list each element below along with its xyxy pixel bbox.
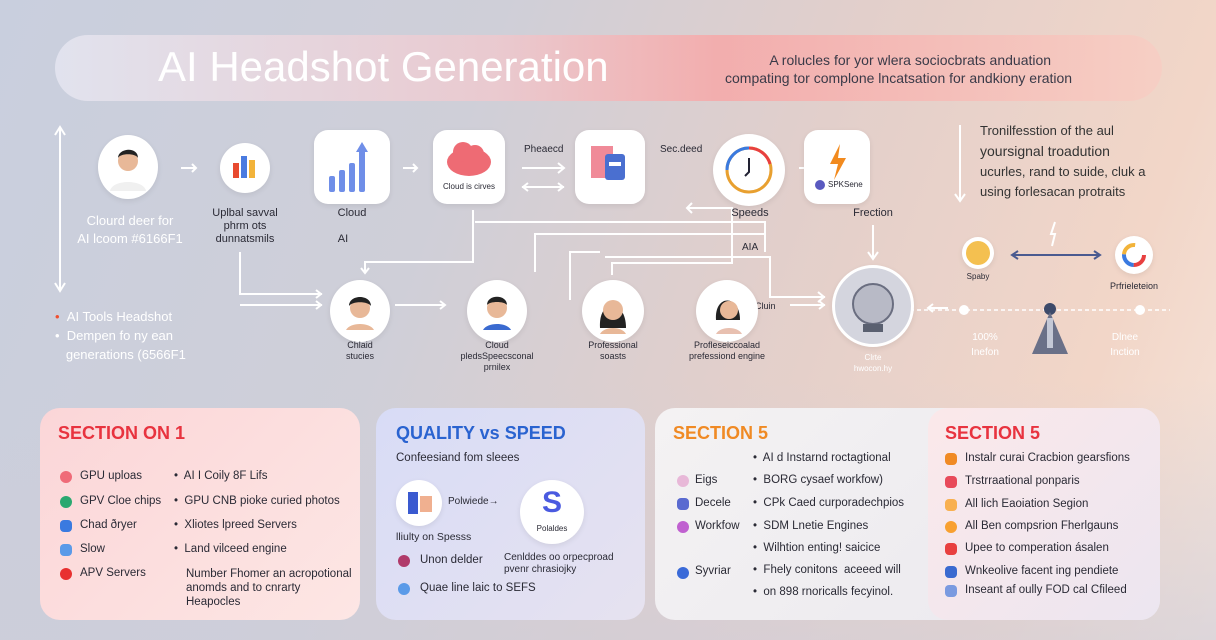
bottom fade: [0, 380, 1216, 640]
panel: quality vs speed: Polaldes: [537, 524, 567, 533]
panel: section 5 orange: • on 898 rnoricalls fecyinol.: [753, 586, 893, 598]
panel: section 5 red: [928, 408, 1160, 620]
node: growth chart box: [314, 130, 390, 204]
text: AI: [338, 233, 348, 245]
panel: quality vs speed: pvenr chrasiojky: [504, 564, 576, 575]
label: sec deed: Sec.deed: [660, 144, 702, 155]
text: Spaby: [967, 272, 989, 281]
label: upload: phrm ots: [224, 220, 266, 232]
label: person 1: Clourd deer for: [87, 213, 173, 228]
text: Inefon: [971, 347, 999, 358]
label: upload: [212, 207, 278, 245]
panel: section 5 orange: Decele: [695, 497, 731, 509]
text block: right description: using forlesacan protraits: [980, 184, 1125, 199]
panel: section 1: Heapocles: [186, 596, 240, 608]
node: cloud box: [433, 130, 505, 204]
left bullet text: • Dempen fo ny ean: [55, 328, 173, 343]
text: prnilex: [484, 362, 510, 372]
panel: section 5 red: Instalr curai Cracbion gearsfions: [965, 452, 1130, 464]
text block: right description: [980, 123, 1146, 199]
panel: section 1: GPV Cloe chips: [80, 495, 161, 507]
panel: quality vs speed: Quae line laic to SEFS: [420, 582, 536, 594]
panel: section 1: Chad ðryer: [80, 519, 137, 531]
panel: section 5 orange: • CPk Caed curporadechpios: [753, 497, 904, 509]
panel: section 5 orange: [655, 408, 1160, 620]
panel: section 5 orange: Syvriar: [695, 565, 731, 577]
text: 100%: [972, 332, 998, 343]
panel: section 5 orange: • Wilhtion enting! saicice: [753, 542, 880, 554]
panel: section 5 red: All Ben compsrion Fherlgauns: [965, 520, 1118, 532]
left bullet text: • AI Tools Headshot: [55, 309, 172, 324]
label: upload: Uplbal savval: [212, 207, 278, 219]
label: phesed: Pheaecd: [524, 144, 563, 155]
panel: section 5 orange: • AI d Instarnd roctagtional: [753, 452, 891, 464]
panel: quality vs speed: [376, 408, 645, 620]
label: person 1: AI lcoom #6166F1: [77, 231, 183, 246]
text: Dlnee: [1112, 332, 1138, 343]
flow diagram connectors: [54, 125, 1170, 354]
panel: section 5 orange: • Fhely conitons aceeed will: [753, 564, 901, 576]
panel: section 5 red: Wnkeolive facent ing pendiete: [965, 565, 1118, 577]
panel: section 1: APV Servers: [80, 567, 146, 579]
right comparison cluster: [962, 237, 994, 269]
panel: quality vs speed: QUALITY vs SPEED: [396, 423, 566, 443]
panel: section 1: • Xliotes lpreed Servers: [174, 519, 297, 531]
title bar: [55, 35, 1162, 101]
panel: section 1: SECTION ON 1: [58, 423, 185, 443]
text: Chlaid: [347, 340, 373, 350]
node: lightning box: SPKSene: [828, 180, 863, 189]
panel: section 5 red: Inseant af oully FOD cal Cfileed: [965, 584, 1127, 596]
text: Cloud: [485, 340, 509, 350]
text: Professional: [588, 340, 638, 350]
text: AIA: [742, 242, 758, 253]
text: stucies: [346, 351, 374, 361]
panel: section 5 orange: Eigs: [695, 474, 717, 486]
text: Cluin: [755, 301, 776, 311]
text block: right description: yoursignal troadution: [980, 143, 1110, 159]
node: document box: [575, 130, 645, 204]
panel: section 1: • AI I Coily 8F Lifs: [174, 470, 268, 482]
node: AI engine circle: [832, 265, 914, 347]
panel: section 5 orange: SECTION 5: [673, 423, 768, 443]
text: Profleseiccoalad: [694, 340, 760, 350]
panel: quality vs speed: Cenlddes oo orpecproad: [504, 552, 614, 563]
node: bar chart circle: [220, 143, 270, 193]
panel: quality vs speed: Confeesiand fom sleees: [396, 452, 519, 464]
label: engine: hwocon.hy: [854, 364, 892, 373]
label: frection: Frection: [853, 207, 893, 219]
text: Prfrieleteion: [1110, 281, 1158, 291]
subtitle: compating tor complone lncatsation for andkiony eration: [725, 70, 1072, 86]
bottom person nodes: [330, 280, 390, 342]
panel: section 1: • Land vilceed engine: [174, 543, 287, 555]
node: speed circle: [713, 134, 785, 206]
panel: section 5 orange: • BORG cysaef workfow): [753, 474, 883, 486]
text: soasts: [600, 351, 626, 361]
text: prefessiond engine: [689, 351, 765, 361]
text: Inction: [1110, 347, 1140, 358]
left bullet text: generations (6566F1: [66, 347, 186, 362]
text block: right description: ucurles, rand to suide, cluk a: [980, 164, 1145, 179]
left bullet text: [55, 309, 186, 362]
panel: section 1: GPU uploas: [80, 470, 142, 482]
panel: section 5 orange: Workfow: [695, 520, 740, 532]
node: person 1: [98, 135, 158, 199]
subtitle: [725, 52, 1072, 86]
panel: quality vs speed: Polwiede→: [448, 496, 499, 507]
panel: section 1: anomds and to cnrarty: [186, 582, 300, 594]
panel: section 5 red: Upee to comperation ásalen: [965, 542, 1109, 554]
label: engine: Clrte: [865, 353, 881, 362]
subtitle: A rolucles for yor wlera sociocbrats anduation: [769, 52, 1051, 68]
label: upload: dunnatsmils: [216, 233, 274, 245]
panel: section 5 red: SECTION 5: [945, 423, 1040, 443]
text block: right description: Tronilfesstion of the aul: [980, 123, 1114, 138]
panel: quality vs speed: S: [542, 486, 562, 519]
title: AI Headshot Generation: [158, 43, 609, 90]
label: person 1: [77, 213, 183, 246]
label: engine: [854, 353, 892, 373]
panel: section 5 red: Trstrraational ponparis: [965, 475, 1080, 487]
panel: section 5 red: All lich Eaoiation Segion: [965, 498, 1088, 510]
node: cloud box: Cloud is cirves: [443, 182, 495, 191]
panel: quality vs speed: Unon delder: [420, 554, 483, 566]
label: speeds: Speeds: [731, 207, 769, 219]
panel: quality vs speed: lliulty on Spesss: [396, 531, 471, 543]
panel: section 1: Slow: [80, 543, 105, 555]
node: lightning box: [804, 130, 870, 204]
panel: section 5 orange: • SDM Lnetie Engines: [753, 520, 868, 532]
label: cloud: Cloud: [338, 207, 366, 219]
panel: section 1: • GPU CNB pioke curied photos: [174, 495, 340, 507]
panel: section 1: [40, 408, 360, 620]
text: pledsSpeecsconal: [460, 351, 534, 361]
panel: section 1: Number Fhomer an acropotional: [186, 568, 352, 580]
